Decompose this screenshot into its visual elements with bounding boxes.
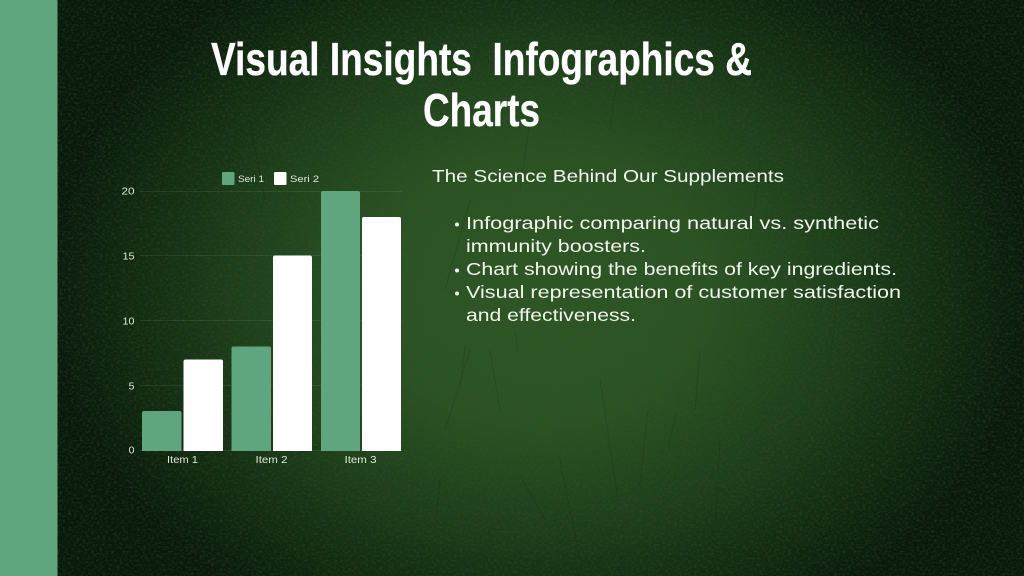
x axis labels: Item 2 — [256, 455, 288, 466]
x axis labels: Item 3 — [344, 455, 377, 466]
bullet: natural vs synthetic: Infographic comparing natural vs. synthetic — [466, 213, 879, 233]
chart legend: Seri 2 — [290, 174, 319, 185]
y axis labels: 20 — [122, 186, 135, 198]
x axis labels — [167, 455, 377, 466]
title: Visual Insights Infographics & — [211, 33, 752, 85]
y axis labels: 10 — [122, 316, 135, 328]
bullet: customer satisfaction: Visual representation of customer satisfaction — [466, 282, 901, 302]
bar chart — [122, 172, 402, 466]
subheading: The Science Behind Our Supplements — [432, 166, 784, 186]
title — [211, 33, 752, 136]
bullet: key ingredients: Chart showing the benefits of key ingredients. — [466, 259, 897, 279]
x axis labels: Item 1 — [167, 455, 198, 466]
y axis labels: 5 — [129, 380, 135, 392]
chart gridlines — [140, 192, 402, 450]
bullet: natural vs synthetic — [455, 213, 879, 256]
series 1 bars — [142, 191, 360, 451]
bullet list — [455, 213, 901, 325]
chart legend — [222, 172, 319, 185]
left accent bar — [0, 0, 58, 576]
y axis labels — [122, 186, 135, 456]
y axis labels: 0 — [129, 444, 135, 456]
series 2 bars — [184, 217, 401, 451]
chart legend: Seri 1 — [238, 174, 264, 185]
y axis labels: 15 — [122, 250, 135, 262]
bullet: customer satisfaction — [455, 282, 901, 325]
bullet: customer satisfaction: and effectiveness. — [466, 305, 636, 325]
bullet: natural vs synthetic: immunity boosters. — [466, 236, 646, 256]
title: Charts — [423, 84, 540, 136]
